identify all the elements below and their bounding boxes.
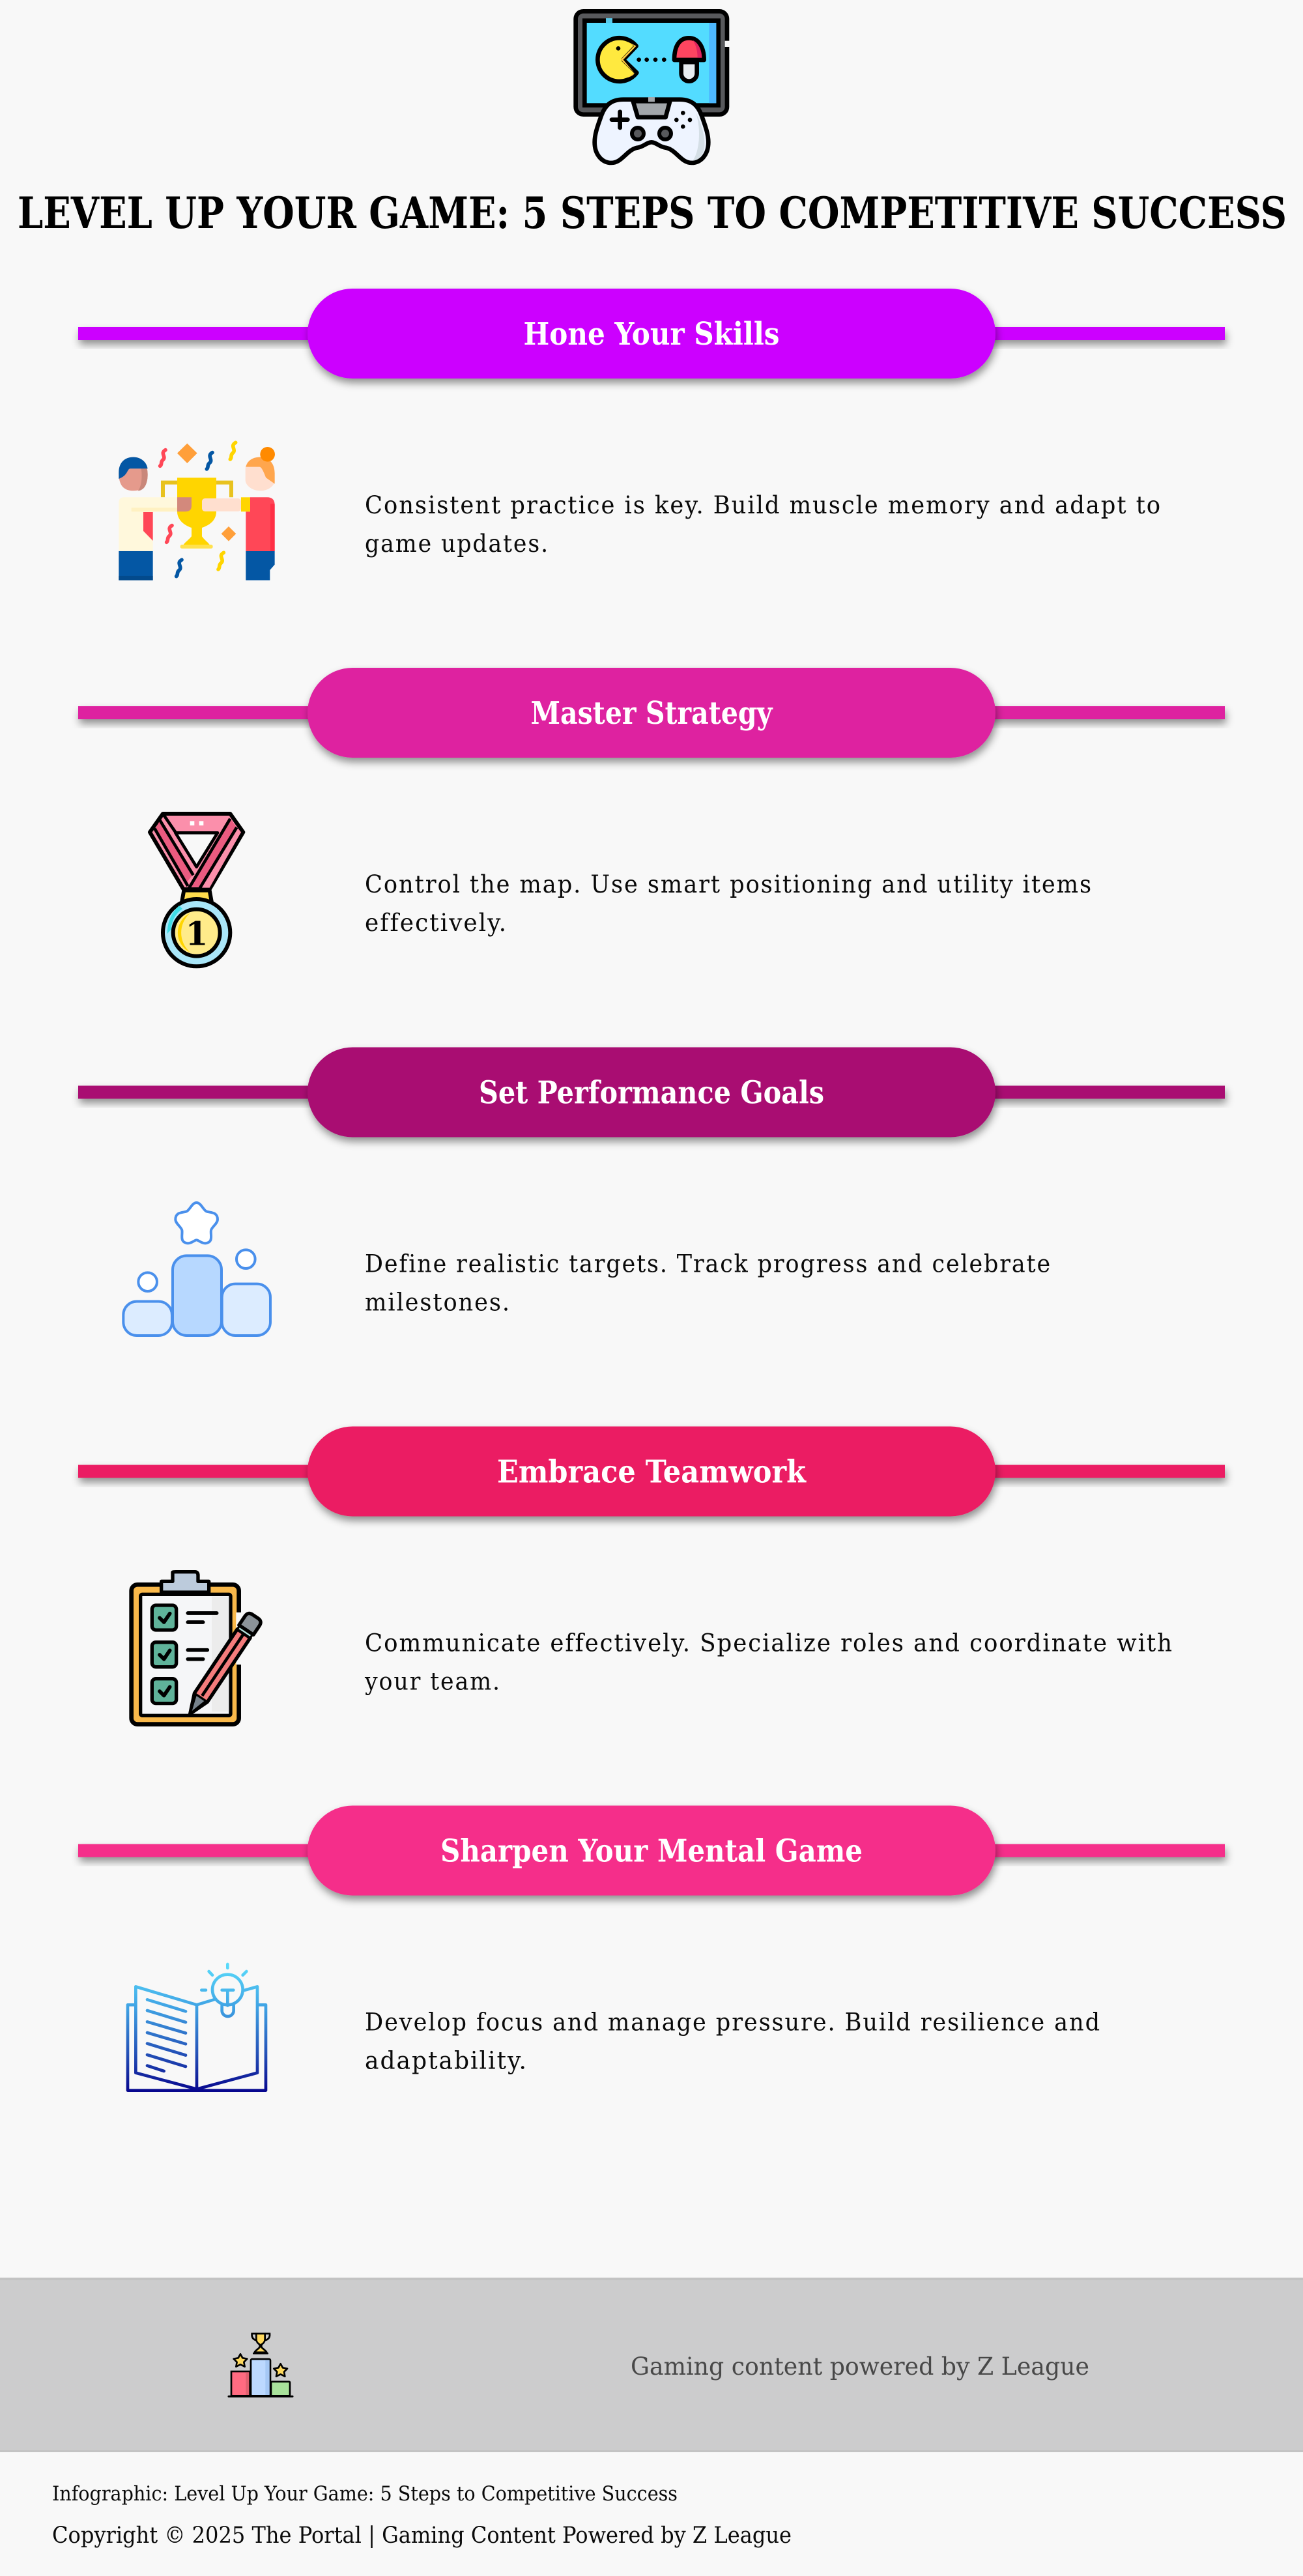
header bar: Master Strategy [78, 668, 1225, 758]
header bar: Hone Your Skills: Hone Your Skills [524, 316, 779, 352]
step 5: Sharpen Your Mental Game [78, 1806, 1225, 2091]
caption: copyright: Copyright © 2025 The Portal | Gaming Content Powered by Z League [52, 2523, 792, 2549]
header bar: Embrace Teamwork [78, 1427, 1225, 1517]
header bar: Embrace Teamwork: Embrace Teamwork [497, 1454, 807, 1491]
text: Set Performance Goals description: Define realistic targets. Track progress and celebrate [365, 1250, 1052, 1278]
icon: first place medal: 1 [186, 915, 208, 953]
footer band [0, 2278, 1303, 2452]
icon: podium with star [123, 1203, 270, 1336]
icon: clipboard checklist and pencil [132, 1572, 263, 1724]
text: Set Performance Goals description [365, 1250, 1052, 1316]
step 4: Embrace Teamwork [78, 1427, 1225, 1724]
footer note: powered by: Gaming content powered by Z League [631, 2353, 1089, 2381]
text: Hone Your Skills description [365, 491, 1162, 558]
step 2: Master Strategy [78, 668, 1225, 966]
icon: teammates holding trophy [119, 442, 275, 580]
text: Master Strategy description [365, 870, 1093, 937]
text: Embrace Teamwork description [364, 1629, 1173, 1695]
text: Hone Your Skills description: game updates. [365, 530, 549, 558]
text: Sharpen Your Mental Game description: adaptability. [365, 2047, 528, 2074]
text: Sharpen Your Mental Game description [365, 2008, 1101, 2074]
text: Hone Your Skills description: Consistent practice is key. Build muscle memory and adapt to [365, 491, 1162, 519]
text: Embrace Teamwork description: your team. [364, 1668, 501, 1695]
header bar: Set Performance Goals [78, 1048, 1225, 1138]
header bar: Sharpen Your Mental Game: Sharpen Your Mental Game [440, 1833, 863, 1870]
icon: monitor and game controller [576, 11, 730, 163]
header bar: Hone Your Skills [78, 289, 1225, 379]
icon: open book with light bulb [128, 1964, 266, 2091]
step 1: Hone Your Skills [78, 289, 1225, 580]
text: Set Performance Goals description: milestones. [365, 1289, 511, 1316]
header bar: Set Performance Goals: Set Performance Goals [479, 1075, 824, 1111]
text: Master Strategy description: effectively. [365, 909, 508, 937]
text: Sharpen Your Mental Game description: Develop focus and manage pressure. Build resilience and [365, 2008, 1101, 2037]
icon: first place medal [150, 814, 243, 966]
caption: infographic title: Infographic: Level Up Your Game: 5 Steps to Competitive Success [52, 2482, 678, 2506]
header bar: Sharpen Your Mental Game [78, 1806, 1225, 1896]
step 3: Set Performance Goals [78, 1048, 1225, 1336]
text: Embrace Teamwork description: Communicate effectively. Specialize roles and coordinate with [365, 1629, 1173, 1657]
text: Master Strategy description: Control the map. Use smart positioning and utility items [365, 870, 1093, 898]
icon: podium with trophy and stars [229, 2334, 293, 2396]
header bar: Master Strategy: Master Strategy [530, 695, 773, 732]
